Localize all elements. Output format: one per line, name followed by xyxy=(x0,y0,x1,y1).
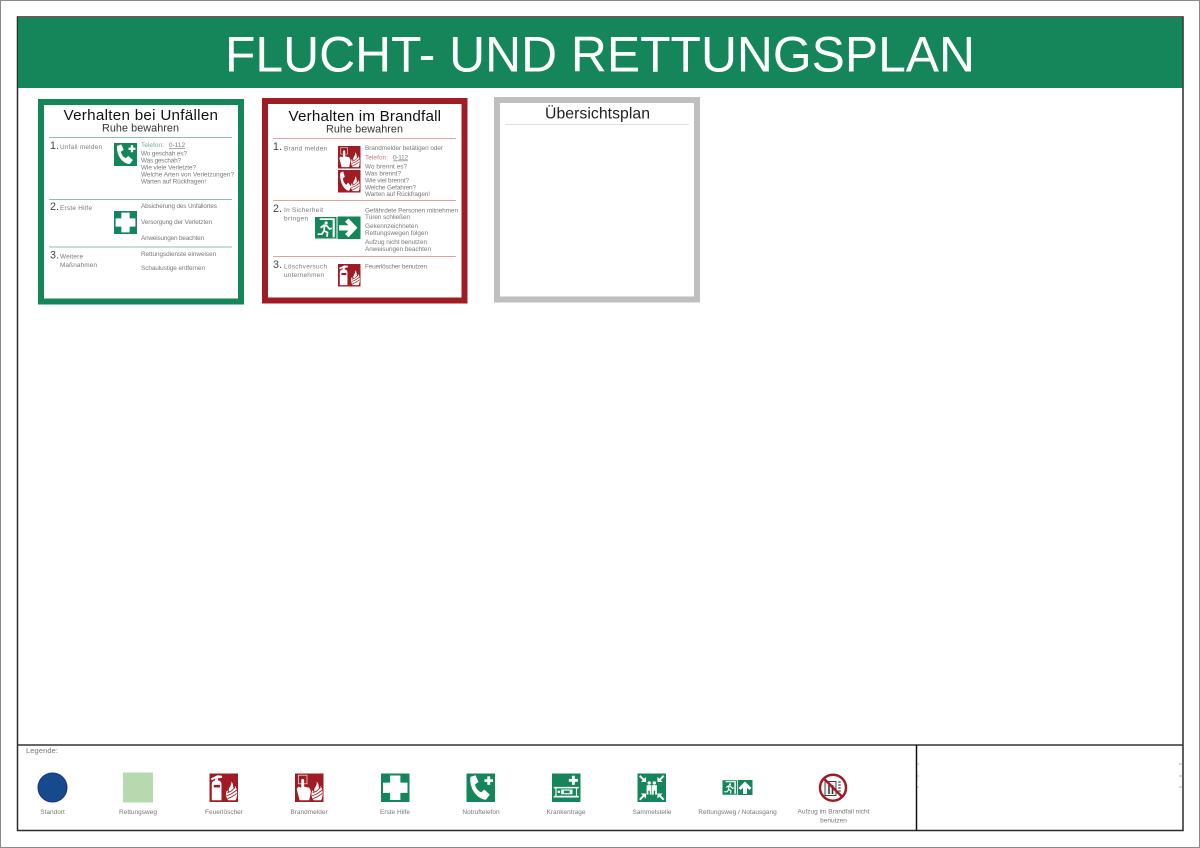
step 2: Absicherung des Unfallortes xyxy=(141,203,217,210)
icon: fire extinguisher xyxy=(338,264,360,286)
heading: Übersichtsplan xyxy=(545,104,650,122)
step 2: 2. xyxy=(273,203,282,215)
step 1: 1. xyxy=(50,140,59,152)
legend item: Brandmelder xyxy=(290,774,328,816)
step 3: 3. xyxy=(273,259,282,271)
legend item: Standort xyxy=(38,773,67,816)
step 1: 1. xyxy=(273,141,282,153)
subheading: Ruhe bewahren xyxy=(102,122,179,134)
legend item: Krankentrage: Krankentrage xyxy=(546,809,586,816)
step 3: Rettungsdienste einweisen xyxy=(141,251,216,258)
step 1: 0-112 xyxy=(393,154,408,162)
legend item: Aufzug im Brandfall nicht benutzen: benutzen xyxy=(820,818,847,824)
heading: Verhalten bei Unfällen xyxy=(64,107,218,124)
legend heading: Legende: xyxy=(26,746,58,755)
step 1 xyxy=(50,140,234,186)
step 1: Brandmelder betätigen oder xyxy=(365,145,444,152)
title banner: FLUCHT- UND RETTUNGSPLAN xyxy=(225,26,975,82)
step 1: Warten auf Rückfragen! xyxy=(365,191,430,198)
legend item: Sammelstelle xyxy=(632,774,672,816)
step 1: Wo brennt es? xyxy=(365,164,407,170)
step 2: In Sicherheit xyxy=(284,207,323,214)
legend item: Aufzug im Brandfall nicht benutzen: Aufzug im Brandfall nicht xyxy=(798,808,870,816)
step 2 xyxy=(50,201,217,242)
legend item: Aufzug im Brandfall nicht benutzen xyxy=(798,775,870,824)
step 3: Feuerlöscher benutzen xyxy=(365,264,427,270)
step 3 xyxy=(273,259,427,286)
step 2: 2. xyxy=(50,201,59,213)
step 1: Was brennt? xyxy=(365,170,401,178)
icon: first aid cross xyxy=(114,211,137,234)
step 2: bringen xyxy=(284,216,308,222)
step 1: 0-112 xyxy=(169,142,185,149)
step 1: Wie viel brennt? xyxy=(365,178,409,184)
step 2: Anweisungen beachten xyxy=(141,235,204,242)
panel: Verhalten bei Unfällen xyxy=(41,102,241,302)
icon: emergency phone xyxy=(114,143,137,166)
step 1: Warten auf Rückfragen! xyxy=(141,178,206,186)
step 3: unternehmen xyxy=(284,272,324,279)
legend item: Feuerlöscher: Feuerlöscher xyxy=(205,809,244,816)
panel: Verhalten im Brandfall xyxy=(265,101,464,300)
step 1: Telefon: xyxy=(365,154,388,162)
legend item: Feuerlöscher xyxy=(205,774,244,816)
step 1: Wie viele Verletzte? xyxy=(141,164,196,172)
step 2: Gefährdete Personen mitnehmen xyxy=(365,208,458,214)
icon: fire alarm xyxy=(338,146,360,168)
legend item: Brandmelder: Brandmelder xyxy=(290,809,328,816)
icon: fire phone xyxy=(338,170,360,192)
icon: escape route sign xyxy=(315,216,360,239)
step 1 xyxy=(273,141,444,198)
step 3: 3. xyxy=(50,250,59,262)
panel: Übersichtsplan xyxy=(497,100,697,300)
step 3: Weitere xyxy=(60,254,83,260)
step 2: Aufzug nicht benutzen xyxy=(365,239,427,246)
step 2: Anweisungen beachten xyxy=(365,246,431,253)
step 2: Erste Hilfe xyxy=(60,205,92,212)
step 2 xyxy=(273,203,458,253)
heading: Verhalten im Brandfall xyxy=(288,108,441,125)
step 2: Gekennzeichneten xyxy=(365,223,418,230)
step 1: Wo geschah es? xyxy=(141,150,187,158)
step 1: Unfall melden xyxy=(60,144,102,151)
legend item: Sammelstelle: Sammelstelle xyxy=(632,809,672,816)
step 1: Telefon: xyxy=(141,142,164,149)
step 2: Türen schließen xyxy=(365,214,410,221)
legend item: Notruftelefon: Notruftelefon xyxy=(462,809,500,816)
legend item: Rettungsweg / Notausgang: Rettungsweg / Notausgang xyxy=(698,809,777,816)
step 3 xyxy=(50,250,216,272)
legend item: Rettungsweg / Notausgang xyxy=(698,780,777,816)
title banner xyxy=(18,18,1182,88)
subheading: Ruhe bewahren xyxy=(326,124,403,136)
legend item: Krankentrage xyxy=(546,774,586,816)
legend item: Standort: Standort xyxy=(40,809,65,816)
step 1: Welche Gefahren? xyxy=(365,184,416,192)
step 2: Rettungswegen folgen xyxy=(365,230,428,237)
step 3: Schaulustige entfernen xyxy=(141,265,205,272)
legend item: Erste Hilfe xyxy=(380,774,410,816)
legend item: Rettungsweg xyxy=(119,772,157,816)
step 2: Versorgung der Verletzten xyxy=(141,219,212,226)
step 1: Brand melden xyxy=(284,146,327,152)
step 1: Welche Arten von Verletzungen? xyxy=(141,172,234,178)
legend box xyxy=(18,745,1183,831)
legend item: Erste Hilfe: Erste Hilfe xyxy=(380,809,410,816)
step 1: Was geschah? xyxy=(141,158,181,164)
step 3: Maßnahmen xyxy=(60,262,97,269)
legend item: Rettungsweg: Rettungsweg xyxy=(119,809,157,816)
legend item: Notruftelefon xyxy=(462,774,500,816)
step 3: Löschversuch xyxy=(284,264,327,270)
